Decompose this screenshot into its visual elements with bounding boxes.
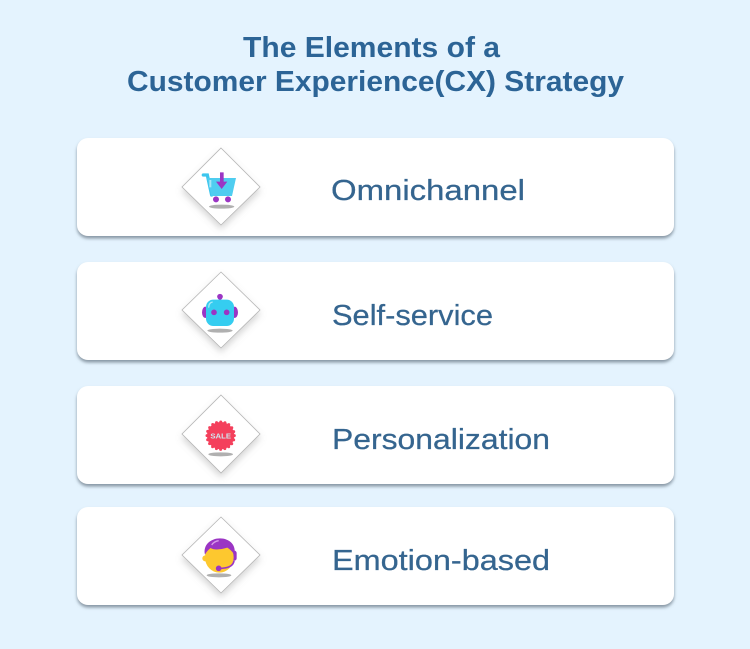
title [127,32,624,98]
panel: Personalization [77,386,674,484]
icon: diamond badge with sale sticker [182,395,260,473]
title: Customer Experience(CX) Strategy [127,66,624,98]
label: Self-service [332,300,493,332]
panel: Emotion-based [77,507,674,605]
card [77,386,674,484]
icon: diamond badge with headset agent [182,517,260,593]
card [77,507,674,605]
label: Emotion-based [332,545,550,577]
panel: Omnichannel [77,138,674,236]
icon: diamond badge with shopping cart [182,148,260,225]
icon: diamond badge with sale sticker: SALE [210,431,231,440]
label: Personalization [332,424,550,456]
title: The Elements of a [243,32,501,64]
card [77,138,674,236]
panel: Self-service [77,262,674,360]
icon: diamond badge with robot [182,272,260,348]
label: Omnichannel [331,175,525,207]
card [77,262,674,360]
